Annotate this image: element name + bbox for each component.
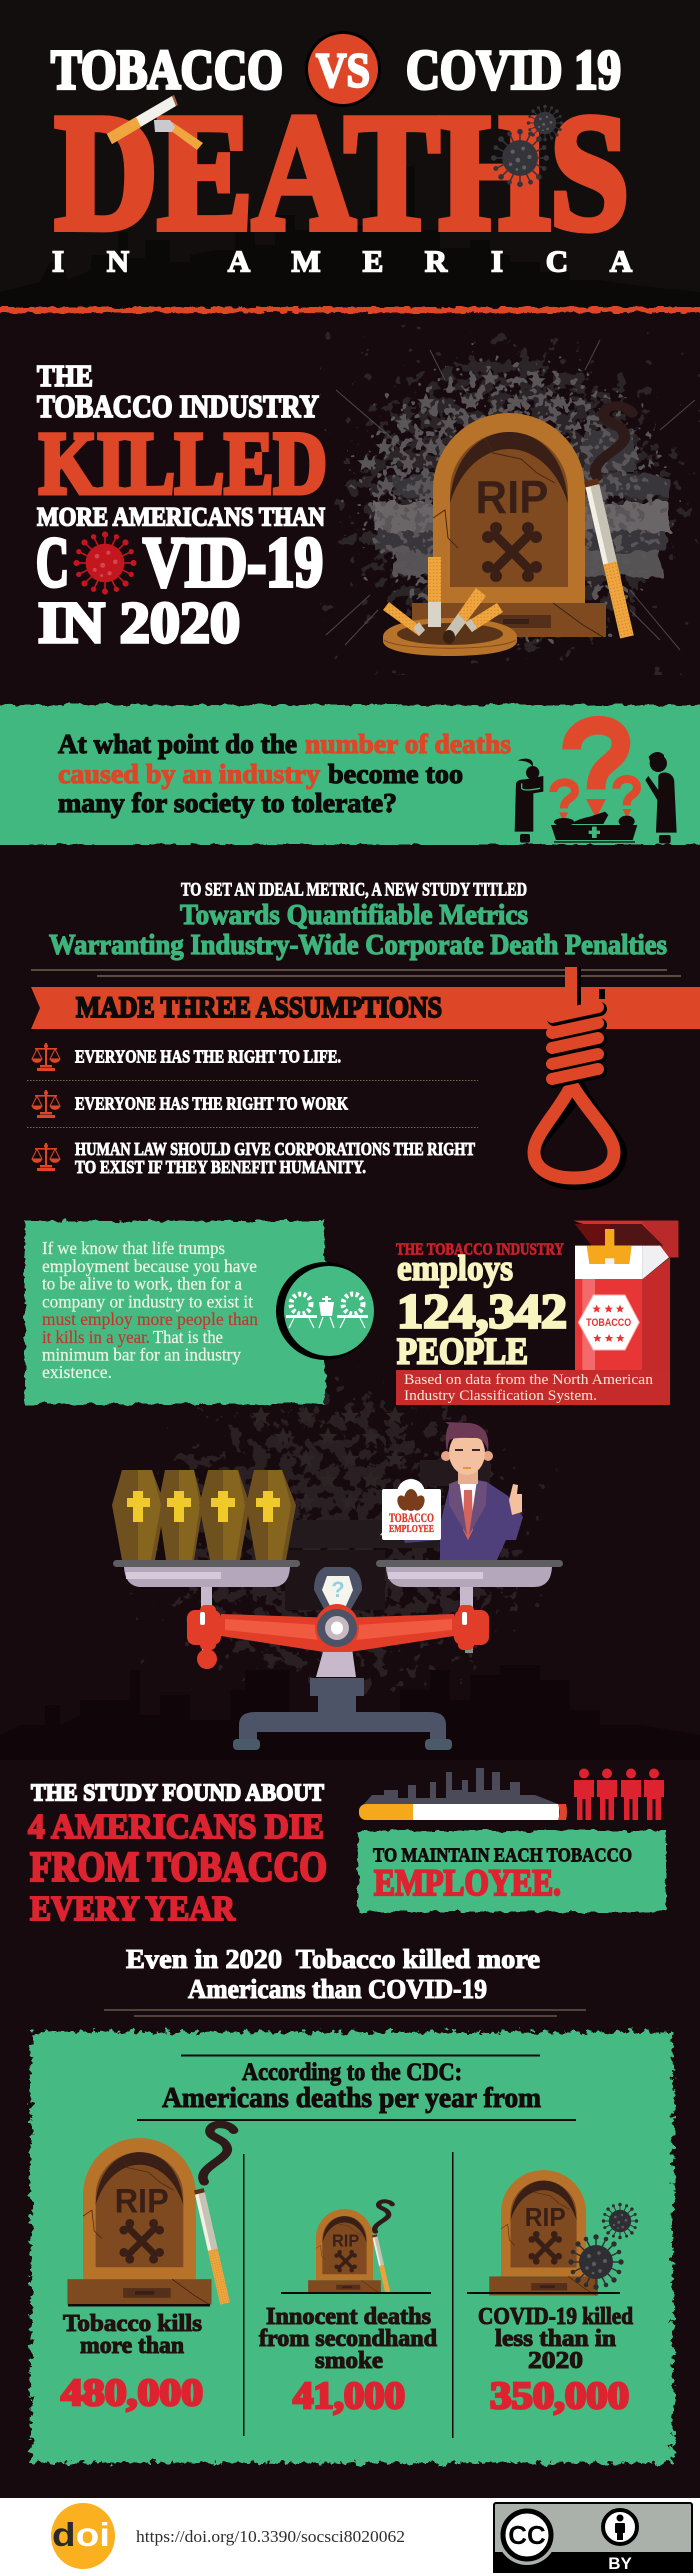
callout text: TO MAINTAIN EACH TOBACCO xyxy=(373,1844,632,1866)
number: 480,000 xyxy=(61,2372,203,2414)
number: 41,000 xyxy=(293,2375,405,2417)
banner heading: MADE THREE ASSUMPTIONS xyxy=(76,991,442,1024)
heading: the: THE xyxy=(37,358,93,393)
doi link text: https://doi.org/10.3390/socsci8020062 xyxy=(136,2527,405,2546)
assumption 1: EVERYONE HAS THE RIGHT TO LIFE. xyxy=(75,1046,341,1066)
icon: cigarette pack: TOBACCO xyxy=(586,1317,631,1329)
icon: cigarette pack xyxy=(573,1221,678,1372)
heading: people: PEOPLE xyxy=(397,1332,528,1372)
even in 2020 statement: Americans than COVID-19 xyxy=(188,1974,487,2004)
heading: covid-19 xyxy=(36,524,323,602)
skyline xyxy=(0,1665,700,1760)
icon: red virus xyxy=(74,532,136,594)
assumption 1 xyxy=(32,1043,341,1071)
icon: rip tombstone xyxy=(412,413,606,637)
icon: rip tombstone: RIP xyxy=(476,471,548,523)
scale illustration xyxy=(0,1355,700,1760)
vs badge xyxy=(305,31,381,107)
body text: minimum bar for an industry xyxy=(42,1344,241,1364)
number: 124,342: 124,342 xyxy=(397,1284,567,1338)
assumption 3: TO EXIST IF THEY BENEFIT HUMANITY. xyxy=(75,1157,366,1177)
card label: EMPLOYEE xyxy=(389,1524,434,1535)
question text: many for society to tolerate? xyxy=(58,788,397,818)
icon: broken cigarette xyxy=(107,95,203,150)
heading text: EVERY YEAR xyxy=(30,1889,236,1928)
body text: to be alive to work, then for a xyxy=(42,1274,242,1294)
panel: study and assumptions xyxy=(27,880,700,1183)
question text: number of deaths xyxy=(305,729,511,759)
title: tobacco: TOBACCO xyxy=(51,40,283,102)
heading text: FROM TOBACCO xyxy=(30,1845,327,1891)
skyline on cigarette xyxy=(364,1768,558,1804)
body text: must employ more people than xyxy=(42,1309,258,1329)
heading: in 2020: IN 2020 xyxy=(38,590,240,655)
icon: smoke xyxy=(203,2124,234,2182)
study title: Towards Quantifiable Metrics xyxy=(180,900,528,931)
label xyxy=(259,2304,438,2374)
heading: tobacco industry: TOBACCO INDUSTRY xyxy=(37,388,319,424)
assumption 3 xyxy=(32,1139,475,1177)
heading: killed: KILLED xyxy=(39,415,327,513)
splatter and flag backdrop xyxy=(320,325,700,675)
column: covid xyxy=(467,2170,638,2417)
panel: study found xyxy=(28,1768,666,2016)
icon: virus large xyxy=(492,130,548,186)
coffins xyxy=(112,1470,296,1560)
heading: more americans than: MORE AMERICANS THAN xyxy=(37,502,325,532)
heading: covid-19: C xyxy=(36,524,69,602)
assumption 2 xyxy=(32,1090,348,1118)
label: 2020 xyxy=(528,2348,583,2374)
heading text xyxy=(28,1780,327,1928)
icon: noose xyxy=(534,967,620,1183)
even in 2020 statement: Even in 2020 Tobacco killed more xyxy=(126,1944,540,1974)
assumption 3: HUMAN LAW SHOULD GIVE CORPORATIONS THE RIGHT xyxy=(75,1139,475,1159)
body text xyxy=(42,1238,258,1382)
header panel xyxy=(0,0,700,308)
question text xyxy=(58,729,511,818)
panel: tobacco killed more xyxy=(36,325,700,675)
label xyxy=(478,2304,634,2374)
vs badge: VS xyxy=(316,42,370,98)
icon: tombstone with viruses: RIP xyxy=(525,2204,566,2232)
card label: TOBACCO xyxy=(389,1511,434,1525)
panel: question band xyxy=(0,705,700,865)
subtitle: in america: IN AMERICA xyxy=(52,244,633,278)
icon: virus small xyxy=(527,105,563,141)
icon: tombstone with cigarette xyxy=(67,2138,230,2305)
body text: If we know that life trumps xyxy=(42,1238,225,1258)
number: 350,000 xyxy=(490,2375,629,2417)
panel: cdc deaths per year xyxy=(31,2032,673,2463)
heading text: 4 AMERICANS DIE xyxy=(28,1807,324,1846)
label: COVID-19 killed xyxy=(478,2304,634,2330)
study title: Warranting Industry-Wide Corporate Death Penalties xyxy=(49,930,667,961)
orange divider stripe xyxy=(0,307,700,313)
icon: mourners and question marks xyxy=(515,725,677,843)
label: more than xyxy=(80,2333,184,2359)
cc by badge: CC xyxy=(508,2520,546,2550)
assumption 2: EVERYONE HAS THE RIGHT TO WORK xyxy=(75,1094,348,1114)
note box: Industry Classification System. xyxy=(404,1388,597,1404)
icon: four people xyxy=(574,1768,664,1820)
icon: tombstone with viruses xyxy=(489,2170,638,2295)
heading text: THE STUDY FOUND ABOUT xyxy=(31,1780,324,1806)
icon: tombstone small xyxy=(308,2209,390,2293)
faint flag backdrop xyxy=(112,1355,562,1725)
banner xyxy=(31,987,700,1029)
intro text: TO SET AN IDEAL METRIC, A NEW STUDY TITLED xyxy=(181,880,527,900)
heading: the tobacco industry: THE TOBACCO INDUSTRY xyxy=(396,1240,564,1258)
title: covid 19: COVID 19 xyxy=(406,40,621,102)
balance scale: ? xyxy=(331,1577,345,1602)
icon: tombstone small: RIP xyxy=(332,2231,359,2251)
study title xyxy=(49,900,667,961)
body text: it kills in a year. xyxy=(42,1327,150,1347)
footer xyxy=(0,2498,700,2573)
column: secondhand smoke xyxy=(259,2201,438,2417)
body text: company or industry to exist it xyxy=(42,1292,253,1312)
body text: existence. xyxy=(42,1362,112,1382)
label: from secondhand xyxy=(259,2326,438,2352)
card label xyxy=(389,1511,434,1535)
heading: Americans deaths per year from xyxy=(162,2083,541,2114)
heading: covid-19: VID-19 xyxy=(143,524,323,602)
label: less than in xyxy=(495,2326,616,2352)
body text: employment because you have xyxy=(42,1256,257,1276)
icon: funeral wreaths xyxy=(276,1262,374,1360)
even in 2020 statement xyxy=(126,1944,540,2004)
label: Tobacco kills xyxy=(63,2311,202,2337)
label: smoke xyxy=(315,2348,383,2374)
cc by badge xyxy=(493,2503,693,2573)
column: tobacco xyxy=(61,2124,234,2414)
doi logo: doi xyxy=(52,2516,110,2553)
question text: become too xyxy=(328,759,463,789)
note box xyxy=(396,1370,670,1405)
callout text: EMPLOYEE. xyxy=(374,1863,561,1904)
label xyxy=(63,2311,202,2359)
question text: At what point do the xyxy=(58,729,297,759)
label: Innocent deaths xyxy=(266,2304,431,2330)
cc by badge: BY xyxy=(608,2554,632,2573)
skyline xyxy=(0,165,700,308)
question text: caused by an industry xyxy=(58,759,321,789)
cigarette xyxy=(359,1804,567,1820)
icon: tombstone with cigarette: RIP xyxy=(115,2182,169,2220)
man holding employee card xyxy=(380,1422,523,1560)
doi logo xyxy=(51,2503,115,2569)
balance scale xyxy=(113,1560,563,1750)
heading: According to the CDC: xyxy=(242,2059,462,2086)
panel: life trumps employment xyxy=(25,1221,678,1405)
icon: cigarette leaning xyxy=(584,478,634,638)
note box: Based on data from the North American xyxy=(404,1372,654,1388)
body text: That is the xyxy=(153,1327,223,1347)
icon: smoke xyxy=(595,406,632,476)
icon: ashtray with butts xyxy=(383,557,517,656)
callout text xyxy=(373,1844,632,1904)
heading xyxy=(162,2059,541,2114)
heading: employs: employs xyxy=(397,1248,513,1288)
icon: smoke xyxy=(375,2201,392,2232)
green callout xyxy=(358,1831,666,1912)
